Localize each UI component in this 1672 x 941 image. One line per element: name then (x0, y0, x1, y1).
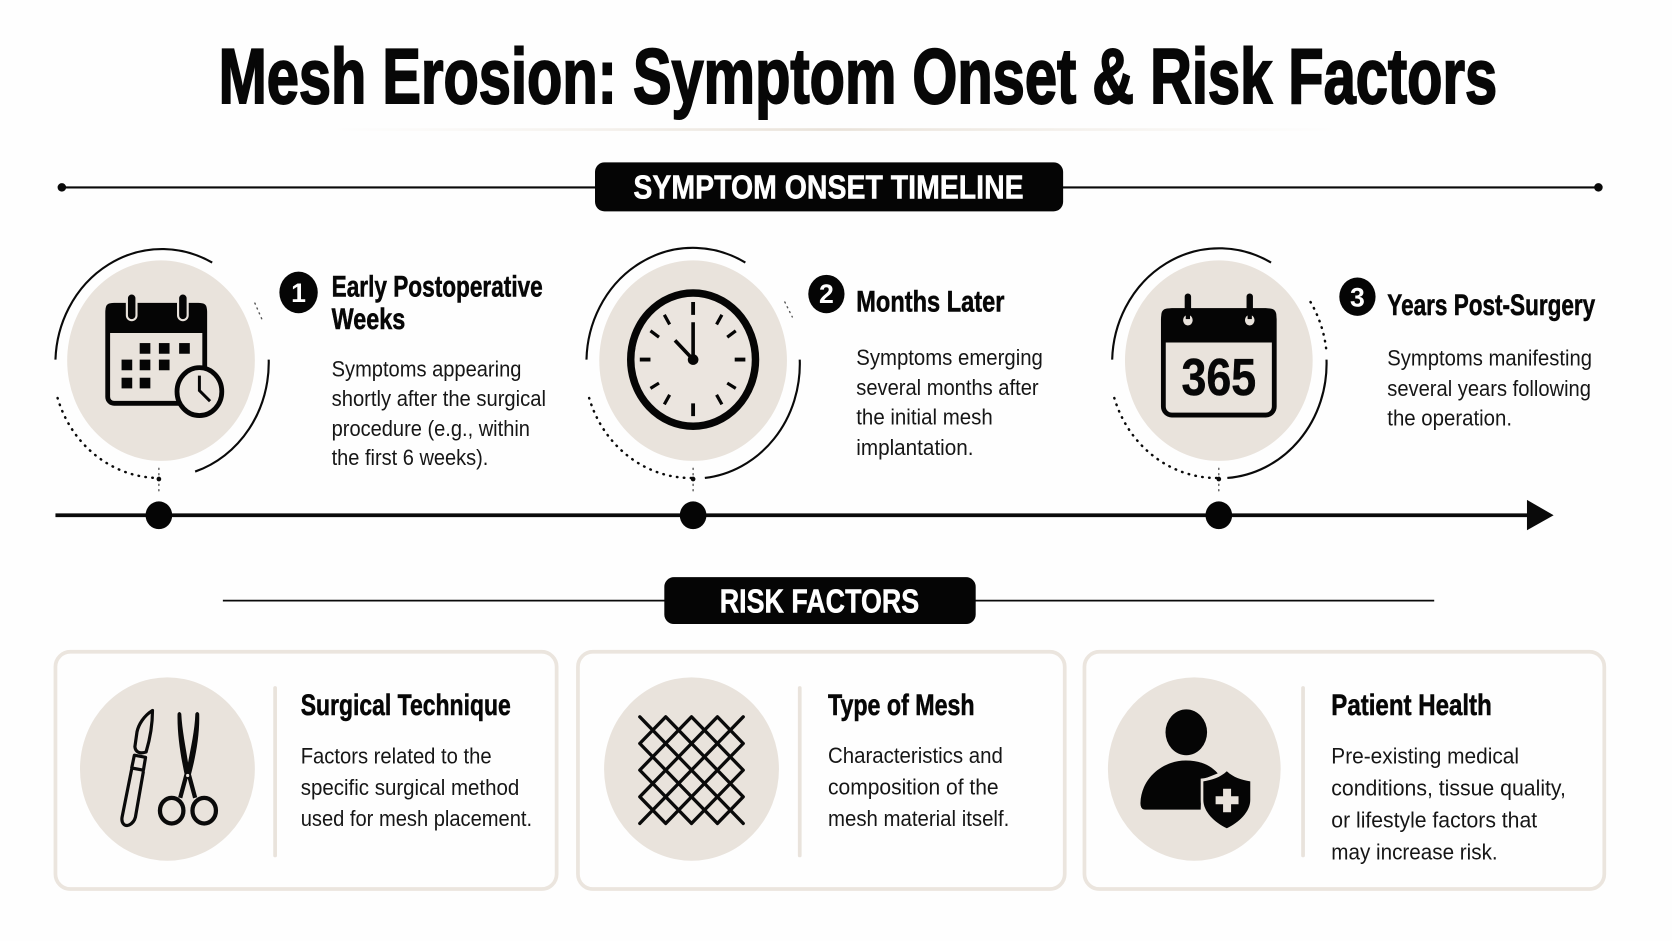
card description: or lifestyle factors that (1331, 808, 1538, 833)
step 1 heading: Early Postoperative (332, 271, 543, 304)
heading: symptom onset timeline (58, 162, 1603, 211)
timeline arrow (55, 500, 1554, 530)
panel: step 3 years post-surgery (1112, 248, 1596, 493)
heading: risk factors: RISK FACTORS (720, 583, 919, 620)
step 3 description: the operation. (1387, 406, 1512, 431)
card heading: Patient Health (1331, 689, 1492, 722)
card description: conditions, tissue quality, (1331, 776, 1566, 801)
heading: risk factors (223, 577, 1434, 624)
step 1 description: the first 6 weeks). (332, 445, 488, 470)
step number 1 (279, 272, 318, 313)
step 2 description: implantation. (856, 435, 974, 460)
card description: composition of the (828, 775, 999, 800)
panel: surgical technique (55, 652, 557, 889)
step 1 heading: Weeks (332, 303, 405, 336)
step 3 description: several years following (1387, 376, 1591, 401)
icon: mesh lattice (604, 677, 779, 861)
panel: step 1 early postoperative weeks (55, 249, 546, 493)
card description: Factors related to the (301, 744, 492, 769)
step 2 description: the initial mesh (856, 405, 993, 430)
icon: calendar 365: 365 (1181, 349, 1256, 407)
panel: step 2 months later (586, 248, 1043, 493)
step 2 description (856, 345, 1043, 460)
step 2 heading: Months Later (856, 286, 1004, 319)
panel: patient health (1084, 652, 1604, 889)
card description: specific surgical method (301, 775, 519, 800)
card description: Pre-existing medical (1331, 744, 1519, 769)
step number 2: 2 (819, 279, 834, 309)
step number 1: 1 (291, 278, 306, 308)
step 1 description (332, 357, 546, 470)
step 3 description (1387, 345, 1592, 431)
step 1 heading (332, 271, 543, 336)
card description: Characteristics and (828, 743, 1003, 768)
card description (1331, 744, 1566, 865)
step number 2 (808, 275, 845, 313)
panel: type of mesh (578, 652, 1065, 889)
icon: scalpel and scissors (80, 677, 255, 861)
card heading: Surgical Technique (301, 689, 511, 722)
step 3 description: Symptoms manifesting (1387, 345, 1592, 370)
step 3 heading: Years Post-Surgery (1387, 289, 1596, 322)
card description: used for mesh placement. (301, 806, 532, 831)
step number 3 (1339, 277, 1376, 316)
card description: mesh material itself. (828, 806, 1009, 831)
card description (828, 743, 1009, 831)
icon: calendar 365 (1112, 248, 1327, 493)
step 1 description: procedure (e.g., within (332, 416, 530, 441)
step 1 description: shortly after the surgical (332, 386, 546, 411)
icon: clock (586, 248, 800, 493)
step 1 description: Symptoms appearing (332, 357, 521, 382)
card heading: Type of Mesh (828, 689, 975, 722)
card description (301, 744, 532, 831)
card description: may increase risk. (1331, 840, 1498, 865)
step 2 description: several months after (856, 375, 1039, 400)
step 2 description: Symptoms emerging (856, 345, 1043, 370)
heading: symptom onset timeline: SYMPTOM ONSET TIMELINE (633, 170, 1024, 207)
icon: person with shield (1108, 677, 1281, 861)
step number 3: 3 (1350, 282, 1365, 312)
icon: calendar with clock (55, 249, 269, 493)
